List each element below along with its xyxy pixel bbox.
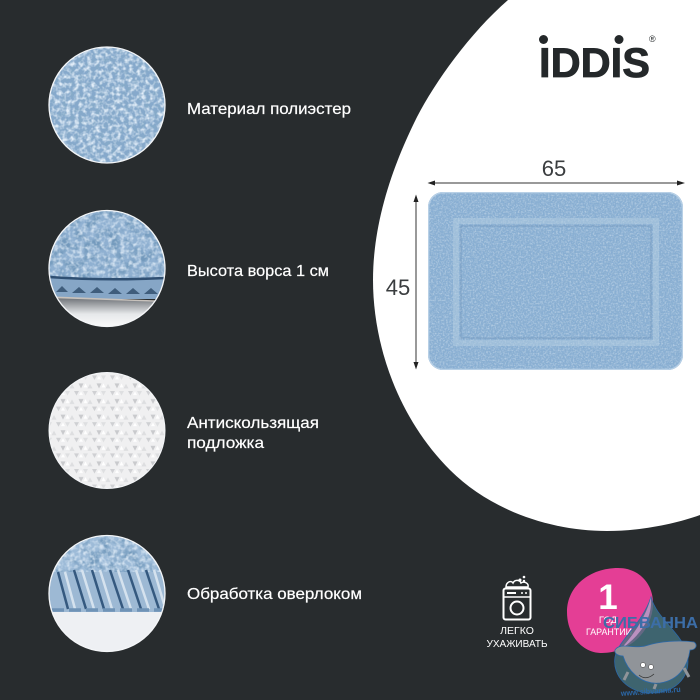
photo circle: polyester material: [49, 47, 165, 163]
label: overlock: Обработка оверлоком: [187, 586, 362, 603]
label: material: Материал полиэстер: [187, 101, 351, 118]
photo circle: anti-slip backing: [49, 372, 165, 489]
warranty badge: ГАРАНТИИ: [586, 627, 632, 638]
watermark drop: [615, 597, 688, 693]
warranty badge: 1: [598, 578, 618, 617]
product: blue bath mat: [428, 192, 683, 370]
label: anti-slip backing: [187, 415, 319, 452]
watermark bath: [615, 641, 696, 683]
photo circle: overlock edging: [49, 535, 165, 652]
label: anti-slip backing: подложка: [187, 435, 264, 452]
logo: IDDIS: IDDIS: [539, 39, 650, 86]
watermark name: СИБВАННА: [603, 615, 698, 632]
watermark: Sibvanna bath mascot: [603, 597, 698, 698]
watermark drop highlight: [620, 597, 651, 650]
label: easy care: УХАЖИВАТЬ: [486, 638, 548, 650]
warranty badge: ГОД: [599, 615, 618, 626]
icon: washing machine: [504, 576, 530, 620]
white curved panel: [373, 0, 700, 531]
label: easy care: [486, 625, 548, 650]
watermark face: [639, 662, 654, 678]
warranty badge: [567, 568, 653, 653]
dimension: height 45: [386, 194, 418, 370]
label: pile height: Высота ворса 1 см: [187, 263, 329, 280]
label: easy care: ЛЕГКО: [500, 625, 534, 637]
label: anti-slip backing: Антискользящая: [187, 415, 319, 432]
photo circle: pile height: [49, 210, 165, 330]
dimension: height 45: 45: [386, 275, 410, 300]
logo: IDDIS: ®: [649, 34, 656, 44]
watermark url: www.sibvanna.ru: [620, 685, 681, 698]
watermark bath feet: [624, 668, 689, 689]
dimension: width 65: [428, 156, 685, 186]
dimension: width 65: 65: [542, 156, 566, 181]
